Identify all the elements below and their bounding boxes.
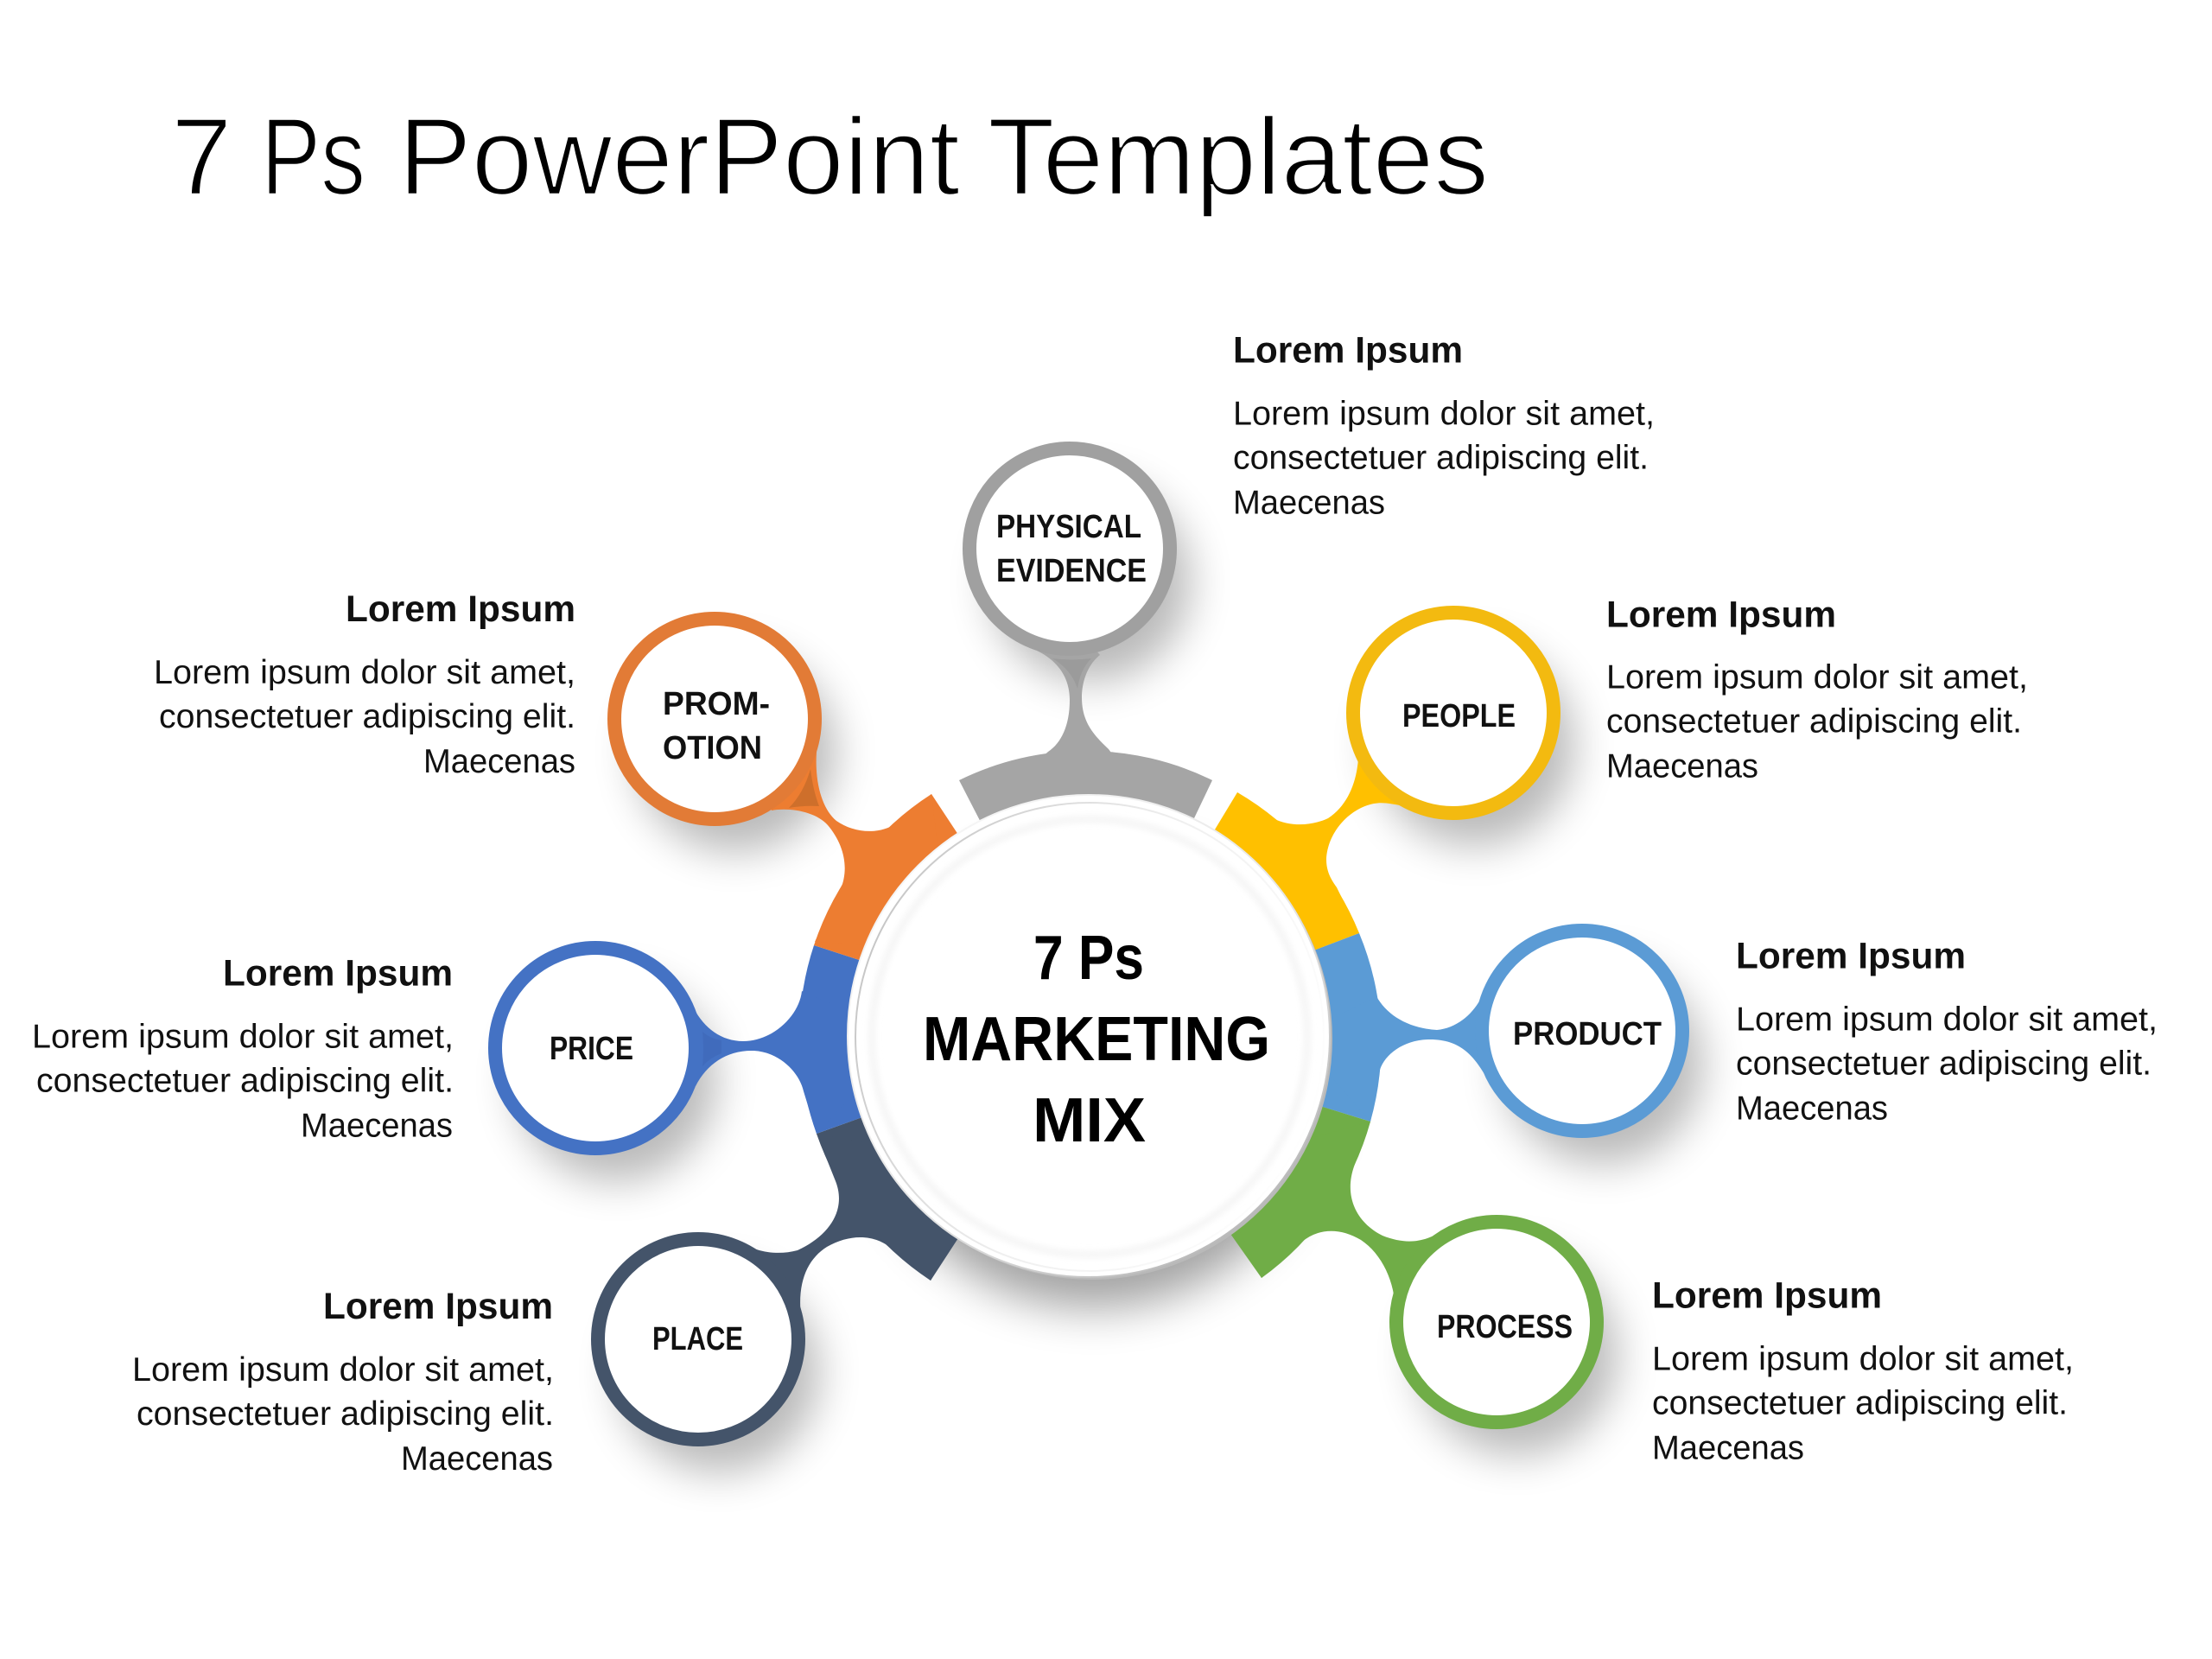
text block: promotion: Lorem ipsum dolor sit amet, xyxy=(154,654,575,691)
spoke: place xyxy=(598,1035,1090,1440)
connector shading: orange xyxy=(789,769,819,808)
segment: yellow arc xyxy=(1090,792,1359,1035)
connector shading: grey xyxy=(1052,658,1091,689)
text block: process: Maecenas xyxy=(1652,1429,1804,1467)
node ring: process xyxy=(1396,1222,1597,1422)
node label: promotion xyxy=(663,686,770,766)
connector: light blue xyxy=(1296,996,1521,1122)
text block: people: Lorem ipsum dolor sit amet, xyxy=(1606,658,2028,696)
text block: product: Lorem ipsum dolor sit amet, xyxy=(1736,1001,2158,1039)
text block: place: Lorem ipsum dolor sit amet, xyxy=(132,1351,554,1389)
center text: MARKETING xyxy=(923,1005,1270,1074)
spoke: product xyxy=(1090,931,1682,1131)
text block: physical evidence: Lorem ipsum dolor sit amet, xyxy=(1233,396,1655,432)
title: PowerPoint xyxy=(398,95,960,218)
text block: place: Lorem Ipsum xyxy=(323,1286,553,1327)
node label: physical evidence: EVIDENCE xyxy=(996,553,1147,589)
text block: price xyxy=(32,952,454,1144)
text block: process: Lorem ipsum dolor sit amet, xyxy=(1652,1341,2074,1377)
text block: price: Lorem ipsum dolor sit amet, xyxy=(32,1018,454,1056)
center disc xyxy=(848,795,1332,1280)
text block: place: consectetuer adipiscing elit. xyxy=(137,1395,554,1433)
text block: promotion xyxy=(154,588,575,780)
text block: physical evidence: Lorem Ipsum xyxy=(1233,330,1463,372)
title: 7 xyxy=(171,95,232,218)
segment: blue arc xyxy=(799,945,1090,1134)
node label: price: PRICE xyxy=(550,1031,633,1067)
center text: 7 Ps xyxy=(1033,924,1144,993)
text block: physical evidence: consectetuer adipiscing elit. xyxy=(1233,439,1649,477)
center text: MIX xyxy=(1033,1086,1146,1155)
segment: light blue arc xyxy=(1090,933,1382,1122)
text block: price: Lorem Ipsum xyxy=(223,952,453,994)
node label: people: PEOPLE xyxy=(1402,698,1516,734)
spoke: promotion xyxy=(614,619,1090,1035)
text block: process: Lorem Ipsum xyxy=(1652,1275,1882,1317)
title: Ps xyxy=(261,95,365,218)
connector: navy xyxy=(754,1134,994,1339)
text block: promotion: Maecenas xyxy=(423,743,575,780)
node label: promotion: PROM- xyxy=(663,686,770,722)
node ring: price xyxy=(495,948,696,1148)
node ring: place xyxy=(598,1239,798,1440)
node label: physical evidence xyxy=(996,509,1147,589)
text block: product: Maecenas xyxy=(1736,1090,1888,1127)
drop shadows xyxy=(516,481,1703,1472)
segment: grey arc xyxy=(959,751,1212,1035)
text block: physical evidence xyxy=(1233,330,1655,522)
text block: product xyxy=(1736,935,2158,1127)
segment: green arc xyxy=(1090,1035,1370,1278)
node label: product: PRODUCT xyxy=(1513,1016,1662,1052)
text block: place xyxy=(132,1286,554,1478)
text block: price: Maecenas xyxy=(301,1108,453,1144)
spoke: process xyxy=(1090,1035,1597,1422)
node ring: promotion xyxy=(614,619,815,819)
connector: yellow xyxy=(1237,759,1417,933)
text block: process xyxy=(1652,1275,2074,1467)
connector: blue xyxy=(665,991,907,1134)
text block: people: Maecenas xyxy=(1606,748,1758,785)
connector: orange xyxy=(760,743,950,950)
title: Templates xyxy=(988,95,1489,218)
text block: product: Lorem Ipsum xyxy=(1736,935,1966,976)
node label: promotion: OTION xyxy=(663,730,762,766)
node ring: physical evidence xyxy=(969,448,1170,649)
text block: promotion: consectetuer adipiscing elit. xyxy=(159,698,575,735)
connector: grey xyxy=(1028,622,1123,769)
spoke: physical evidence xyxy=(959,448,1212,1035)
center text xyxy=(923,924,1270,1155)
text block: physical evidence: Maecenas xyxy=(1233,484,1385,522)
node label: place: PLACE xyxy=(652,1321,743,1357)
node label: process: PROCESS xyxy=(1437,1309,1573,1345)
text block: people: consectetuer adipiscing elit. xyxy=(1606,703,2022,740)
text block: product: consectetuer adipiscing elit. xyxy=(1736,1046,2152,1082)
text block: promotion: Lorem Ipsum xyxy=(346,588,575,630)
node ring: people xyxy=(1353,613,1554,813)
segment: orange arc xyxy=(814,794,1090,1035)
spoke: people xyxy=(1090,613,1554,1035)
connector shading: blue xyxy=(702,1032,721,1066)
text block: people: Lorem Ipsum xyxy=(1606,594,1836,636)
text block: place: Maecenas xyxy=(401,1440,553,1478)
spoke: price xyxy=(495,945,1090,1148)
segment: navy arc xyxy=(817,1035,1090,1281)
text block: people xyxy=(1606,594,2028,785)
text block: price: consectetuer adipiscing elit. xyxy=(36,1063,454,1099)
connector: green xyxy=(1210,1122,1452,1335)
node label: physical evidence: PHYSICAL xyxy=(996,509,1141,545)
node ring: product xyxy=(1482,931,1682,1131)
text block: process: consectetuer adipiscing elit. xyxy=(1652,1384,2068,1422)
title xyxy=(171,95,1489,218)
